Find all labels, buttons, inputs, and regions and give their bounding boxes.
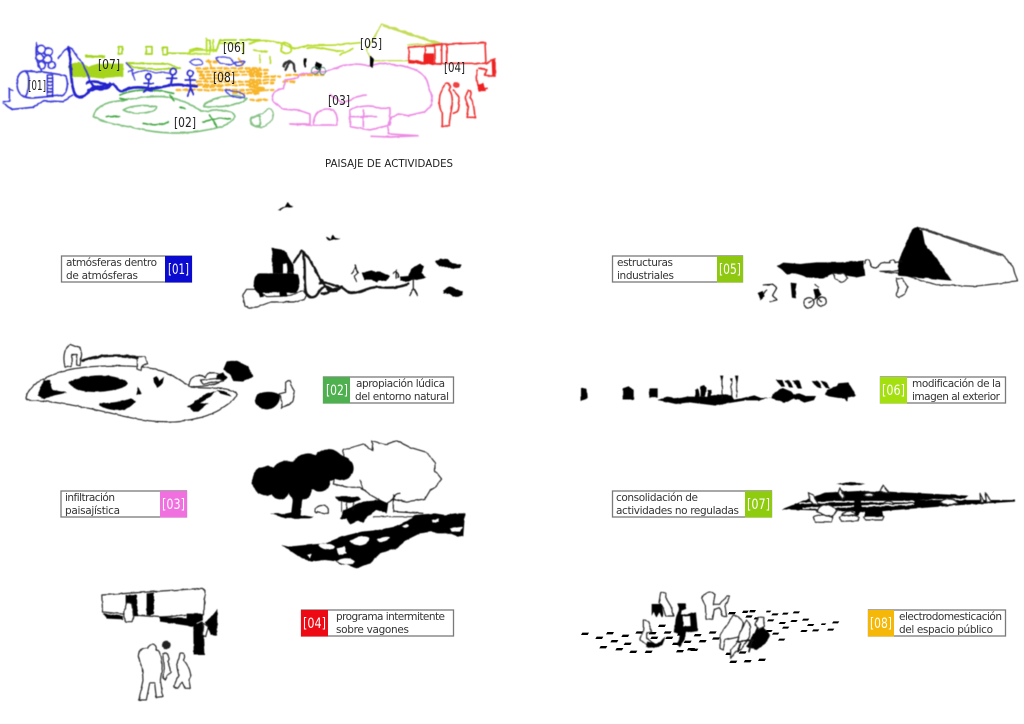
- seated and standing figures: [640, 592, 770, 658]
- illustration 01: tank, hose, birds and clouds: [242, 202, 463, 308]
- label 07: [07]: [747, 497, 770, 513]
- label 04: [04]: [303, 616, 326, 632]
- sketch label [04]: [04]: [444, 61, 465, 76]
- label 06: [880, 377, 1006, 404]
- sketch label [06]: [06]: [223, 41, 245, 56]
- label 02: apropiación lúdica: [356, 378, 445, 390]
- black tree crown and trunk: [252, 449, 354, 518]
- label 03: [03]: [162, 497, 185, 513]
- label 01: [62, 256, 192, 282]
- illustration 07: elongated oval terrain with tables: [782, 482, 1015, 522]
- sketch layer: 05 cyclists: [283, 56, 374, 74]
- label 01: de atmósferas: [66, 270, 138, 282]
- label 04: sobre vagones: [336, 624, 409, 636]
- label 06: modificación de la: [912, 378, 1001, 390]
- title: PAISAJE DE ACTIVIDADES: [325, 158, 453, 170]
- label 08: [08]: [870, 616, 892, 632]
- illustration 02: lake island with figures: [26, 344, 295, 422]
- label 06: [06]: [882, 383, 905, 399]
- sketch layer: 06 lime outline and hangar: [250, 24, 440, 63]
- label 02: [323, 377, 454, 404]
- illustration 08: plaza grid with seated figures: [581, 592, 839, 663]
- label 07: actividades no reguladas: [616, 505, 739, 517]
- illustration 05: industrial structure and cyclists: [758, 227, 1018, 308]
- sketch label [02]: [02]: [174, 116, 196, 131]
- label 01: [01]: [168, 262, 189, 278]
- label 07: consolidación de: [616, 492, 698, 504]
- sketch label [05]: [05]: [360, 37, 382, 52]
- illustration 06: vegetation silhouettes and panels: [581, 376, 856, 406]
- label 07: [612, 491, 772, 518]
- label 02: [02]: [326, 383, 348, 399]
- sketch label [03]: [03]: [328, 94, 350, 109]
- sketch label [01]: [01]: [28, 79, 46, 94]
- label 05: industriales: [617, 270, 674, 282]
- label 03: [61, 491, 187, 518]
- sketch layer: 02 green lake: [93, 90, 260, 133]
- label 03: infiltración: [65, 492, 115, 504]
- sketch layer: 07 and 06 lime vegetation: [68, 38, 260, 78]
- sketch line work: [3, 24, 495, 137]
- sketch layer: 08 orange dashes: [177, 58, 260, 100]
- sketch layer: 03 pink tree canopy: [272, 63, 432, 137]
- label 05: estructuras: [617, 257, 673, 269]
- sketch label [07]: [07]: [98, 58, 120, 73]
- label 06: imagen al exterior: [912, 391, 1001, 403]
- label 03: paisajística: [65, 505, 120, 517]
- sketch layer: 01 blue atmosphere: [3, 43, 245, 109]
- label 05: [612, 256, 743, 282]
- label 08: [868, 610, 1006, 636]
- plaza paving squares: [581, 610, 839, 663]
- illustration 04: wagon and walking people: [102, 588, 217, 700]
- label 08: electrodomesticación: [899, 611, 1002, 623]
- sketch label [08]: [08]: [213, 71, 235, 86]
- label 04: programa intermitente: [336, 611, 445, 623]
- label 08: del espacio público: [899, 624, 993, 636]
- label 04: [301, 610, 454, 636]
- composite coloured landscape sketch: [3, 24, 495, 137]
- label 05: [05]: [719, 262, 741, 278]
- label 01: atmósferas dentro: [66, 257, 157, 269]
- illustration 03: trees and canopy: [252, 441, 465, 568]
- label 02: del entorno natural: [355, 391, 449, 403]
- sketch layer: 04 red wagon and people: [408, 43, 495, 126]
